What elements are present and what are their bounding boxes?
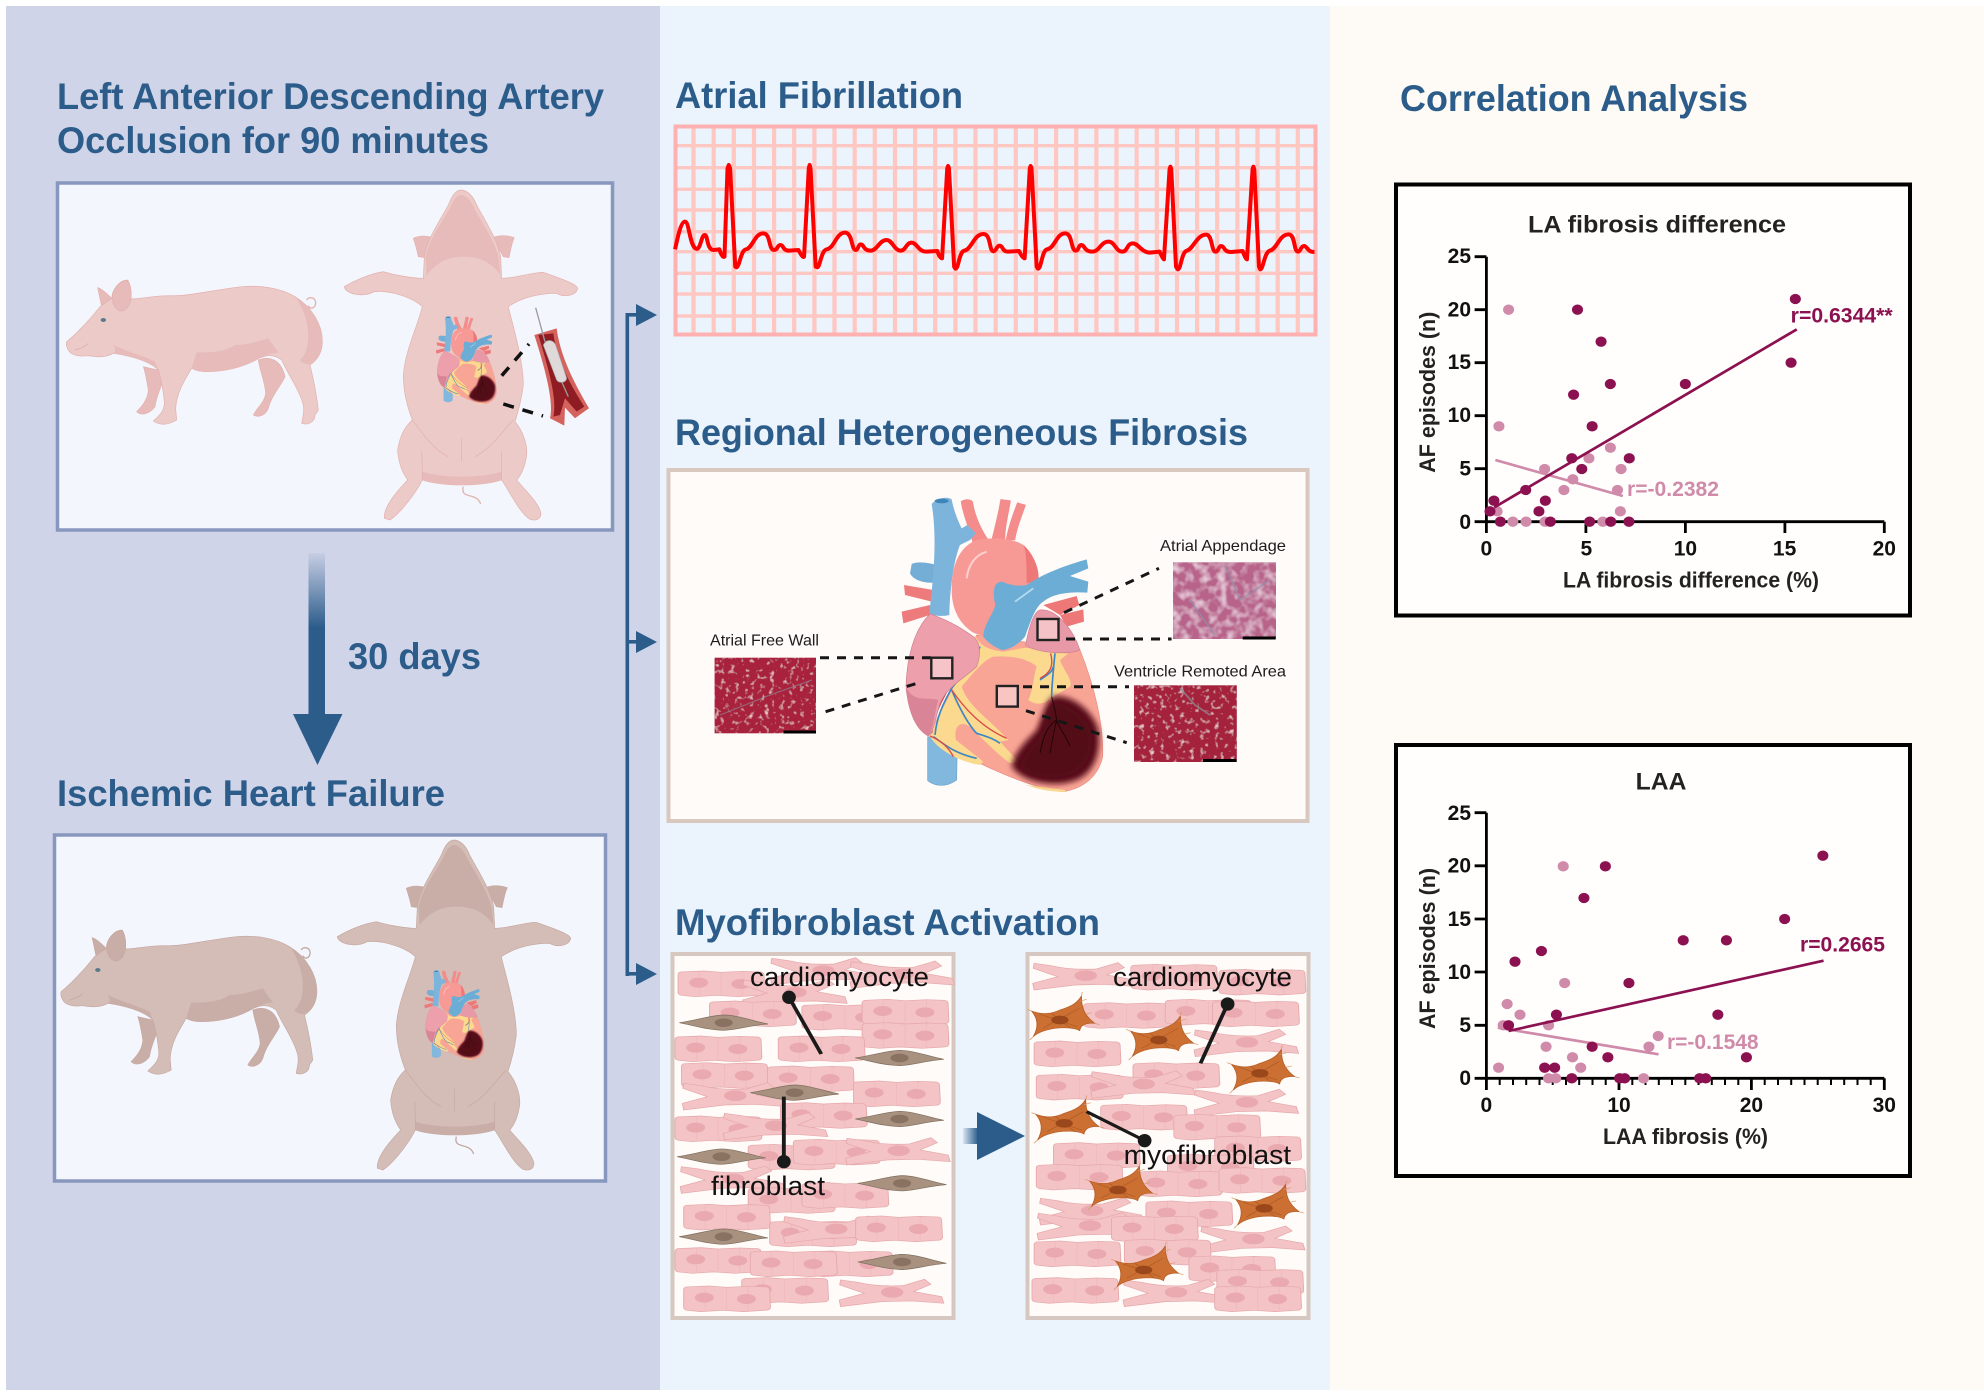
x axis title: LAA fibrosis (%) — [1603, 1124, 1768, 1149]
x tick labels: 10 — [1607, 1094, 1631, 1117]
heading: occlusion: Occlusion for 90 minutes — [57, 120, 489, 161]
icon: heart with infarct in failing pig — [424, 970, 484, 1060]
panel: heart failure pig box — [54, 835, 606, 1181]
x axis title: LA fibrosis difference (%) — [1563, 568, 1819, 593]
icon: myofibroblast cells — [1027, 992, 1304, 1290]
panel: heart with histology — [668, 470, 1308, 821]
x tick labels: 20 — [1873, 538, 1896, 561]
y tick labels: 15 — [1448, 908, 1471, 931]
arrow: branching connector to three outcomes — [626, 304, 657, 985]
y axis title: AF episodes (n) — [1415, 868, 1440, 1029]
y tick labels: 15 — [1448, 351, 1471, 374]
label: ventricle remoted area: Ventricle Remoted Area — [1114, 664, 1286, 681]
y tick labels: 5 — [1459, 458, 1471, 481]
chart title: LA fibrosis difference — [1528, 212, 1786, 239]
heading: myofibroblast activation: Myofibroblast Activation — [675, 902, 1100, 943]
chart: LA fibrosis difference scatter — [1396, 184, 1910, 616]
icon: heart failure pig ventral view — [337, 840, 571, 1170]
label: cardiomyocyte: cardiomyocyte — [1113, 962, 1292, 992]
y tick labels: 10 — [1448, 404, 1471, 427]
x tick labels: 0 — [1481, 538, 1492, 561]
arrow: 30 days progression — [293, 553, 342, 765]
label: r value dark: r=0.6344** — [1791, 305, 1894, 328]
label: r value light: r=-0.1548 — [1667, 1031, 1759, 1054]
chart: LAA fibrosis scatter — [1396, 745, 1910, 1176]
minor x ticks — [1500, 1078, 1871, 1085]
icon: heart with infarct in pig — [436, 316, 496, 404]
x tick labels — [1481, 538, 1896, 561]
histology: atrial free wall — [715, 658, 816, 734]
leader lines — [1087, 997, 1234, 1147]
panel: fibroblast tissue — [672, 954, 955, 1318]
x tick labels: 15 — [1773, 538, 1797, 561]
heading: occlusion: Left Anterior Descending Artery — [57, 76, 604, 117]
y tick labels: 20 — [1448, 299, 1471, 322]
axes — [1475, 257, 1884, 533]
y tick labels: 10 — [1448, 961, 1471, 984]
label: r value light: r=-0.2382 — [1627, 478, 1719, 501]
x tick labels: 10 — [1674, 538, 1697, 561]
data points and regression lines — [1493, 850, 1828, 1083]
callout: dashed lines and sampling squares — [820, 568, 1172, 743]
panel: left background — [6, 6, 660, 1390]
y tick labels: 0 — [1459, 1067, 1471, 1090]
label: cardiomyocyte: cardiomyocyte — [750, 962, 929, 992]
x tick labels: 20 — [1740, 1094, 1763, 1117]
histology: ventricle remoted area — [1134, 685, 1237, 762]
x tick labels — [1481, 1094, 1896, 1117]
icon: heart failure pig side view — [61, 930, 317, 1074]
label: atrial free wall: Atrial Free Wall — [710, 633, 819, 650]
heading: ischemic heart failure: Ischemic Heart Failure — [57, 773, 445, 814]
data points and regression lines — [1484, 294, 1801, 527]
y tick labels — [1448, 245, 1471, 534]
y tick labels: 25 — [1448, 802, 1471, 825]
icon: fibroblast cells — [677, 1015, 946, 1270]
y axis title: AF episodes (n) — [1415, 312, 1440, 473]
panel: myofibroblast tissue — [1027, 954, 1308, 1318]
label: r value dark: r=0.2665 — [1800, 934, 1885, 957]
heading: occlusion — [57, 76, 604, 161]
y tick labels: 5 — [1459, 1014, 1471, 1037]
heading: regional heterogeneous fibrosis: Regional Heterogeneous Fibrosis — [675, 412, 1248, 453]
y tick labels — [1448, 802, 1471, 1090]
chart: ECG trace on grid — [674, 125, 1317, 336]
heading: correlation analysis: Correlation Analysis — [1400, 78, 1748, 119]
icon: anatomical heart with infarct — [902, 498, 1103, 792]
chart title: LAA — [1636, 768, 1686, 795]
icon: healthy pig ventral view — [344, 190, 578, 520]
label: myofibroblast: myofibroblast — [1124, 1140, 1292, 1170]
leader lines — [777, 991, 821, 1168]
callout: dashed zoom lines to artery — [502, 344, 543, 416]
icon: healthy pig side view — [66, 280, 322, 424]
label: 30 days: 30 days — [348, 636, 481, 677]
x tick labels: 0 — [1481, 1094, 1492, 1117]
x tick labels: 30 — [1873, 1094, 1896, 1117]
y tick labels: 25 — [1448, 245, 1471, 268]
panel: healthy pig box — [58, 183, 612, 530]
histology: atrial appendage — [1173, 562, 1276, 640]
panel: middle background — [660, 6, 1330, 1390]
y tick labels: 20 — [1448, 855, 1471, 878]
label: fibroblast: fibroblast — [711, 1171, 826, 1201]
y tick labels: 0 — [1459, 511, 1471, 534]
panel: right background — [1330, 6, 1984, 1390]
x tick labels: 5 — [1581, 538, 1593, 561]
icon: artery with balloon catheter — [534, 308, 589, 426]
axes — [1475, 813, 1884, 1090]
arrow: activation — [963, 1112, 1025, 1160]
label: atrial appendage: Atrial Appendage — [1160, 538, 1286, 555]
heading: atrial fibrillation: Atrial Fibrillation — [675, 75, 963, 116]
